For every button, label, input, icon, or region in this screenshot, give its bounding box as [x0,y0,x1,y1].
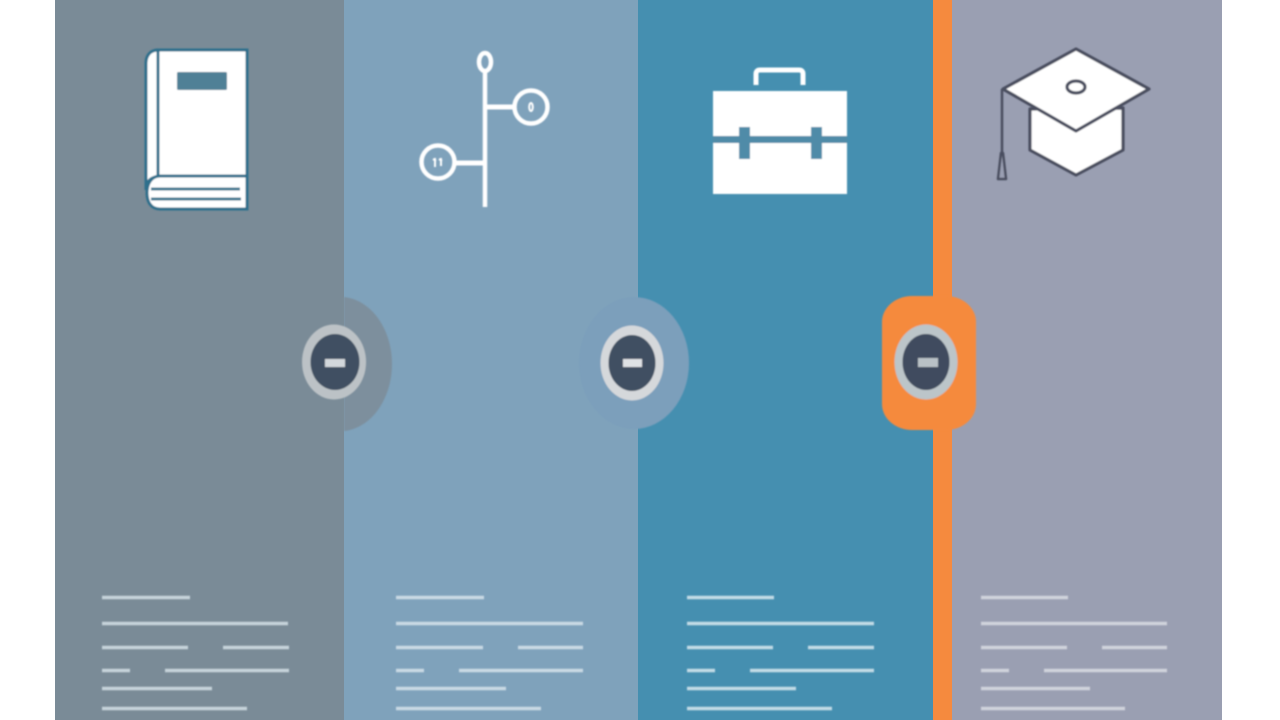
connector button: column three to four [882,296,976,430]
icon: graduation cap [998,49,1149,179]
panel: column three [638,0,933,720]
text placeholder lines: column one [102,598,289,708]
orange divider stripe [933,0,952,720]
text placeholder lines: column two [396,598,583,708]
text placeholder lines: column three [687,598,874,708]
text placeholder lines: column four [981,598,1167,708]
panel: column four [952,0,1222,720]
connector button: column two to three [579,297,689,429]
connector button: column one to two [302,297,392,431]
panel: column two [344,0,638,720]
icon: book [146,50,247,209]
panel: column one [55,0,344,720]
icon: briefcase [713,70,847,194]
icon: branching timeline [422,53,548,207]
